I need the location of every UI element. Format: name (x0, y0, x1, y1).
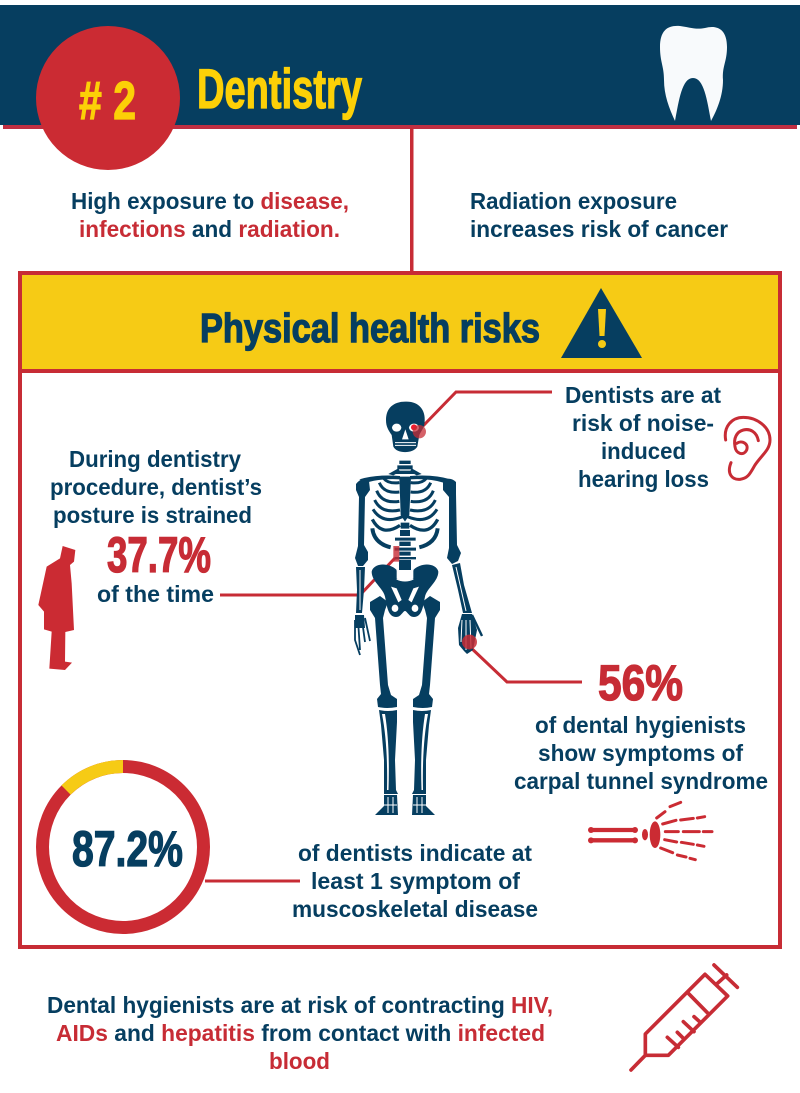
icon: ear (725, 417, 770, 479)
icon: tooth (660, 26, 727, 121)
callout: strained posture: During dentistry (69, 446, 241, 472)
text: blood contact risk: Dental hygienists are at risk of contracting HIV, (47, 992, 553, 1018)
callout: strained posture: 37.7% (107, 527, 211, 583)
skull (386, 402, 426, 452)
callout: strained posture: of the time (97, 581, 214, 607)
callout: strained posture: posture is strained (53, 502, 252, 528)
skeleton (355, 402, 482, 815)
text: radiation exposure: increases risk of cancer (470, 216, 728, 242)
sternum (399, 477, 411, 522)
text: blood contact risk (47, 992, 553, 1074)
title: Dentistry (197, 57, 362, 120)
donut chart: 87.2% (72, 821, 183, 877)
callout: carpal tunnel (514, 655, 768, 794)
rank badge (36, 26, 180, 170)
right arm (443, 479, 482, 654)
text: radiation exposure (470, 188, 728, 242)
panel: physical health risks (20, 273, 780, 947)
callout: musculoskeletal disease (292, 840, 538, 922)
text: blood contact risk: blood (269, 1048, 330, 1074)
callout: musculoskeletal disease: muscoskeletal disease (292, 896, 538, 922)
callout: carpal tunnel: carpal tunnel syndrome (514, 768, 768, 794)
pelvis (372, 565, 438, 617)
callout: noise-induced hearing loss (565, 382, 721, 492)
icon: warning triangle (561, 288, 642, 358)
callout: carpal tunnel: 56% (598, 655, 683, 711)
callout: noise-induced hearing loss: induced (601, 438, 686, 464)
callout: noise-induced hearing loss: hearing loss (578, 466, 709, 492)
donut chart (42, 766, 204, 928)
callout: noise-induced hearing loss: Dentists are at (565, 382, 721, 408)
collarbones (359, 475, 451, 483)
callout: strained posture: procedure, dentist’s (50, 474, 262, 500)
text: blood contact risk: AIDs and hepatitis from contact with infected (56, 1020, 545, 1046)
text: exposure to disease: infections and radiation. (79, 216, 340, 242)
callout: carpal tunnel: show symptoms of (538, 740, 743, 766)
rib cage and spine (359, 461, 451, 570)
callout: noise-induced hearing loss: risk of noise- (572, 410, 714, 436)
divider between exposure statements (410, 128, 414, 274)
text: exposure to disease (71, 188, 349, 242)
legs (370, 596, 440, 815)
header banner (0, 5, 800, 129)
callout: strained posture (50, 446, 262, 607)
rank badge: # 2 (79, 71, 136, 131)
text: radiation exposure: Radiation exposure (470, 188, 677, 214)
vertebrae (395, 523, 416, 570)
ribs (372, 479, 438, 547)
heading band: Physical health risks (200, 305, 540, 351)
heading band (20, 275, 780, 373)
icon: syringe (631, 965, 737, 1070)
icon: stooped person (38, 546, 75, 670)
text: exposure to disease: High exposure to disease, (71, 188, 349, 214)
callout: carpal tunnel: of dental hygienists (535, 712, 746, 738)
callout: musculoskeletal disease: least 1 symptom of (311, 868, 520, 894)
callout: musculoskeletal disease: of dentists indicate at (298, 840, 532, 866)
neck (396, 461, 414, 474)
left arm (355, 479, 370, 655)
leader lines (205, 392, 582, 881)
icon: hand bones (588, 802, 712, 860)
